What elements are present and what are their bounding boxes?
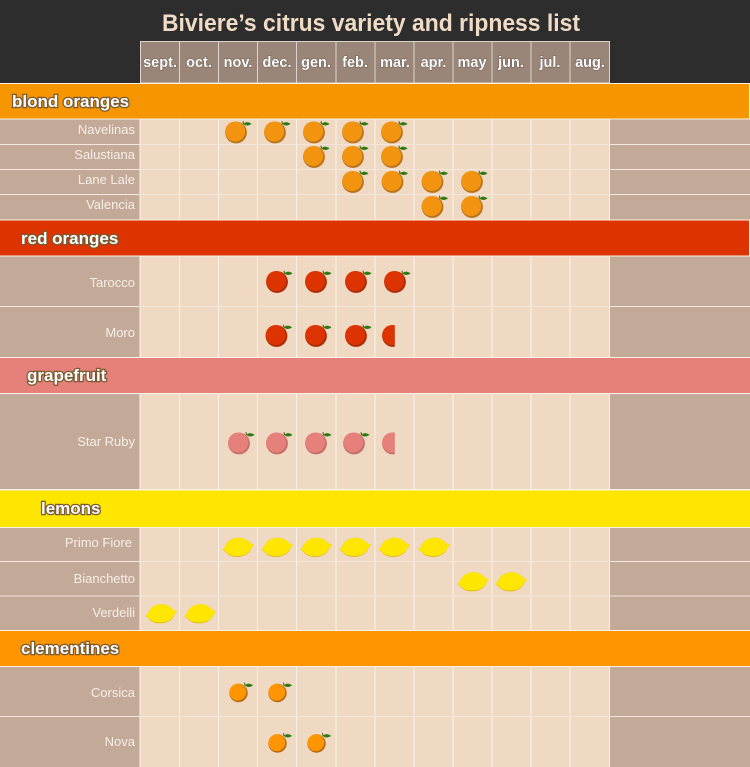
band: blond oranges bbox=[0, 83, 750, 120]
row: Navelinas: Navelinas bbox=[78, 122, 135, 137]
month header: jul. bbox=[539, 55, 560, 71]
row: Corsica: Corsica bbox=[91, 685, 136, 700]
row: Nova bbox=[105, 733, 331, 753]
month header: dec. bbox=[262, 55, 292, 71]
band: grapefruit: grapefruit bbox=[27, 366, 107, 385]
row: Nova: Nova bbox=[105, 734, 136, 749]
month header: sept. bbox=[143, 55, 177, 71]
row: Lane Lale: Lane Lale bbox=[78, 172, 135, 187]
row: Valencia bbox=[86, 196, 488, 218]
month header: aug. bbox=[575, 55, 605, 71]
row: Star Ruby: Star Ruby bbox=[77, 434, 135, 449]
month header: mar. bbox=[380, 55, 410, 71]
month header bbox=[140, 41, 610, 83]
row: Navelinas bbox=[78, 121, 408, 143]
band: clementines bbox=[0, 630, 750, 667]
month header: oct. bbox=[186, 55, 212, 71]
row: Verdelli bbox=[92, 604, 216, 623]
band: clementines: clementines bbox=[21, 639, 119, 658]
month header: nov. bbox=[224, 55, 252, 71]
row: Tarocco: Tarocco bbox=[89, 275, 135, 290]
band: blond oranges: blond oranges bbox=[12, 92, 129, 111]
row: Primo Fiore bbox=[65, 535, 450, 557]
row: Verdelli: Verdelli bbox=[92, 605, 135, 620]
month header: jun. bbox=[497, 55, 524, 71]
month header: feb. bbox=[342, 55, 368, 71]
band: grapefruit bbox=[0, 357, 750, 394]
row: Primo Fiore: Primo Fiore bbox=[65, 535, 132, 550]
band: red oranges bbox=[0, 220, 750, 256]
band: red oranges: red oranges bbox=[21, 229, 118, 248]
row: Salustiana: Salustiana bbox=[74, 147, 136, 162]
month header: may bbox=[457, 55, 487, 71]
row: Moro: Moro bbox=[105, 325, 135, 340]
month header: apr. bbox=[421, 55, 446, 71]
row: Tarocco bbox=[89, 271, 410, 293]
row: Moro bbox=[105, 325, 408, 347]
row: Bianchetto: Bianchetto bbox=[74, 571, 135, 586]
row: Corsica bbox=[91, 683, 292, 702]
row: Lane Lale bbox=[78, 171, 488, 193]
row: Bianchetto bbox=[74, 571, 527, 591]
row: Valencia: Valencia bbox=[86, 197, 136, 212]
row: Salustiana bbox=[74, 146, 408, 168]
band: lemons: lemons bbox=[41, 499, 101, 518]
band: lemons bbox=[0, 489, 750, 528]
row: Star Ruby bbox=[77, 432, 408, 454]
title: Biviere’s citrus variety and ripness list bbox=[162, 10, 580, 37]
month header: gen. bbox=[301, 55, 331, 71]
